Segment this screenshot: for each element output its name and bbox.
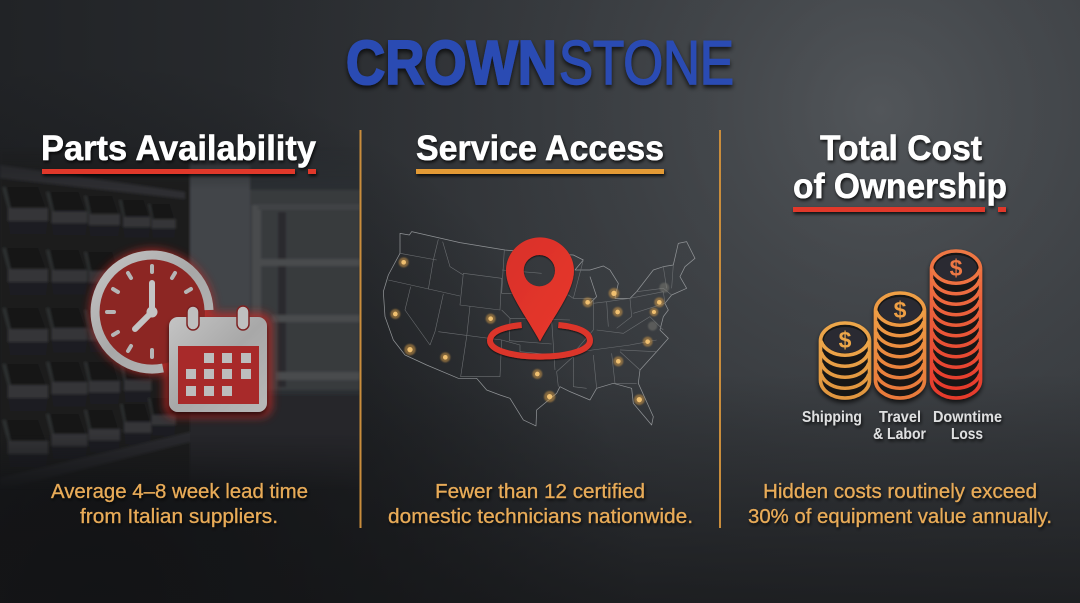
red glow (91, 250, 271, 416)
title: STONE (559, 29, 734, 98)
stack labels: Travel (879, 409, 921, 426)
state lines (388, 239, 673, 388)
technician dots (390, 257, 669, 405)
caption: parts availability: Average 4–8 week lead time (51, 481, 308, 503)
caption: total cost of ownership: Hidden costs routinely exceed (763, 481, 1037, 503)
caption: parts availability (51, 481, 308, 528)
stack: shipping: $ (839, 327, 852, 353)
calendar rings (187, 306, 249, 330)
caption: service access: Fewer than 12 certified (435, 481, 645, 503)
warehouse photo backdrop (0, 164, 360, 468)
clock ticks (107, 266, 191, 357)
heading: Total Cost of Ownership: of Ownership (793, 167, 1007, 206)
chart: coin stacks (802, 251, 1002, 443)
stack: shipping (820, 323, 870, 398)
caption: total cost of ownership (748, 481, 1052, 528)
ring (490, 325, 590, 357)
calendar day grid (186, 353, 251, 396)
US map with technician locations (383, 232, 695, 426)
caption: service access: domestic technicians nationwide. (388, 506, 693, 528)
stack: travel and labor: $ (894, 297, 907, 323)
heading: Total Cost of Ownership (793, 129, 1007, 212)
stack: travel and labor (876, 293, 924, 398)
stack labels: Loss (951, 426, 983, 443)
stack: downtime loss: $ (950, 255, 963, 281)
caption: parts availability: from Italian suppliers. (80, 506, 278, 528)
icon: location pin with ring (490, 237, 590, 357)
caption: service access (388, 481, 693, 528)
column dividers (360, 130, 721, 528)
clock ring (95, 255, 209, 369)
icon: clock and calendar (91, 250, 271, 416)
parts bins (2, 187, 176, 467)
clock hands (135, 283, 158, 329)
title (346, 29, 734, 98)
heading: Total Cost of Ownership: Total Cost (820, 129, 982, 168)
calendar (169, 317, 267, 412)
stack labels (802, 409, 1002, 443)
heading: Parts Availability: Parts Availability (41, 129, 317, 168)
heading: Service Access: Service Access (416, 129, 664, 168)
stack: downtime loss (932, 251, 980, 398)
caption: total cost of ownership: 30% of equipment value annually. (748, 506, 1052, 528)
country outline (383, 232, 695, 426)
title: CROWN (346, 29, 557, 98)
stack labels: Downtime (933, 409, 1002, 426)
stack labels: Shipping (802, 409, 862, 426)
stack labels: & Labor (873, 426, 926, 443)
shelving rack (252, 204, 360, 395)
pin (506, 237, 574, 342)
